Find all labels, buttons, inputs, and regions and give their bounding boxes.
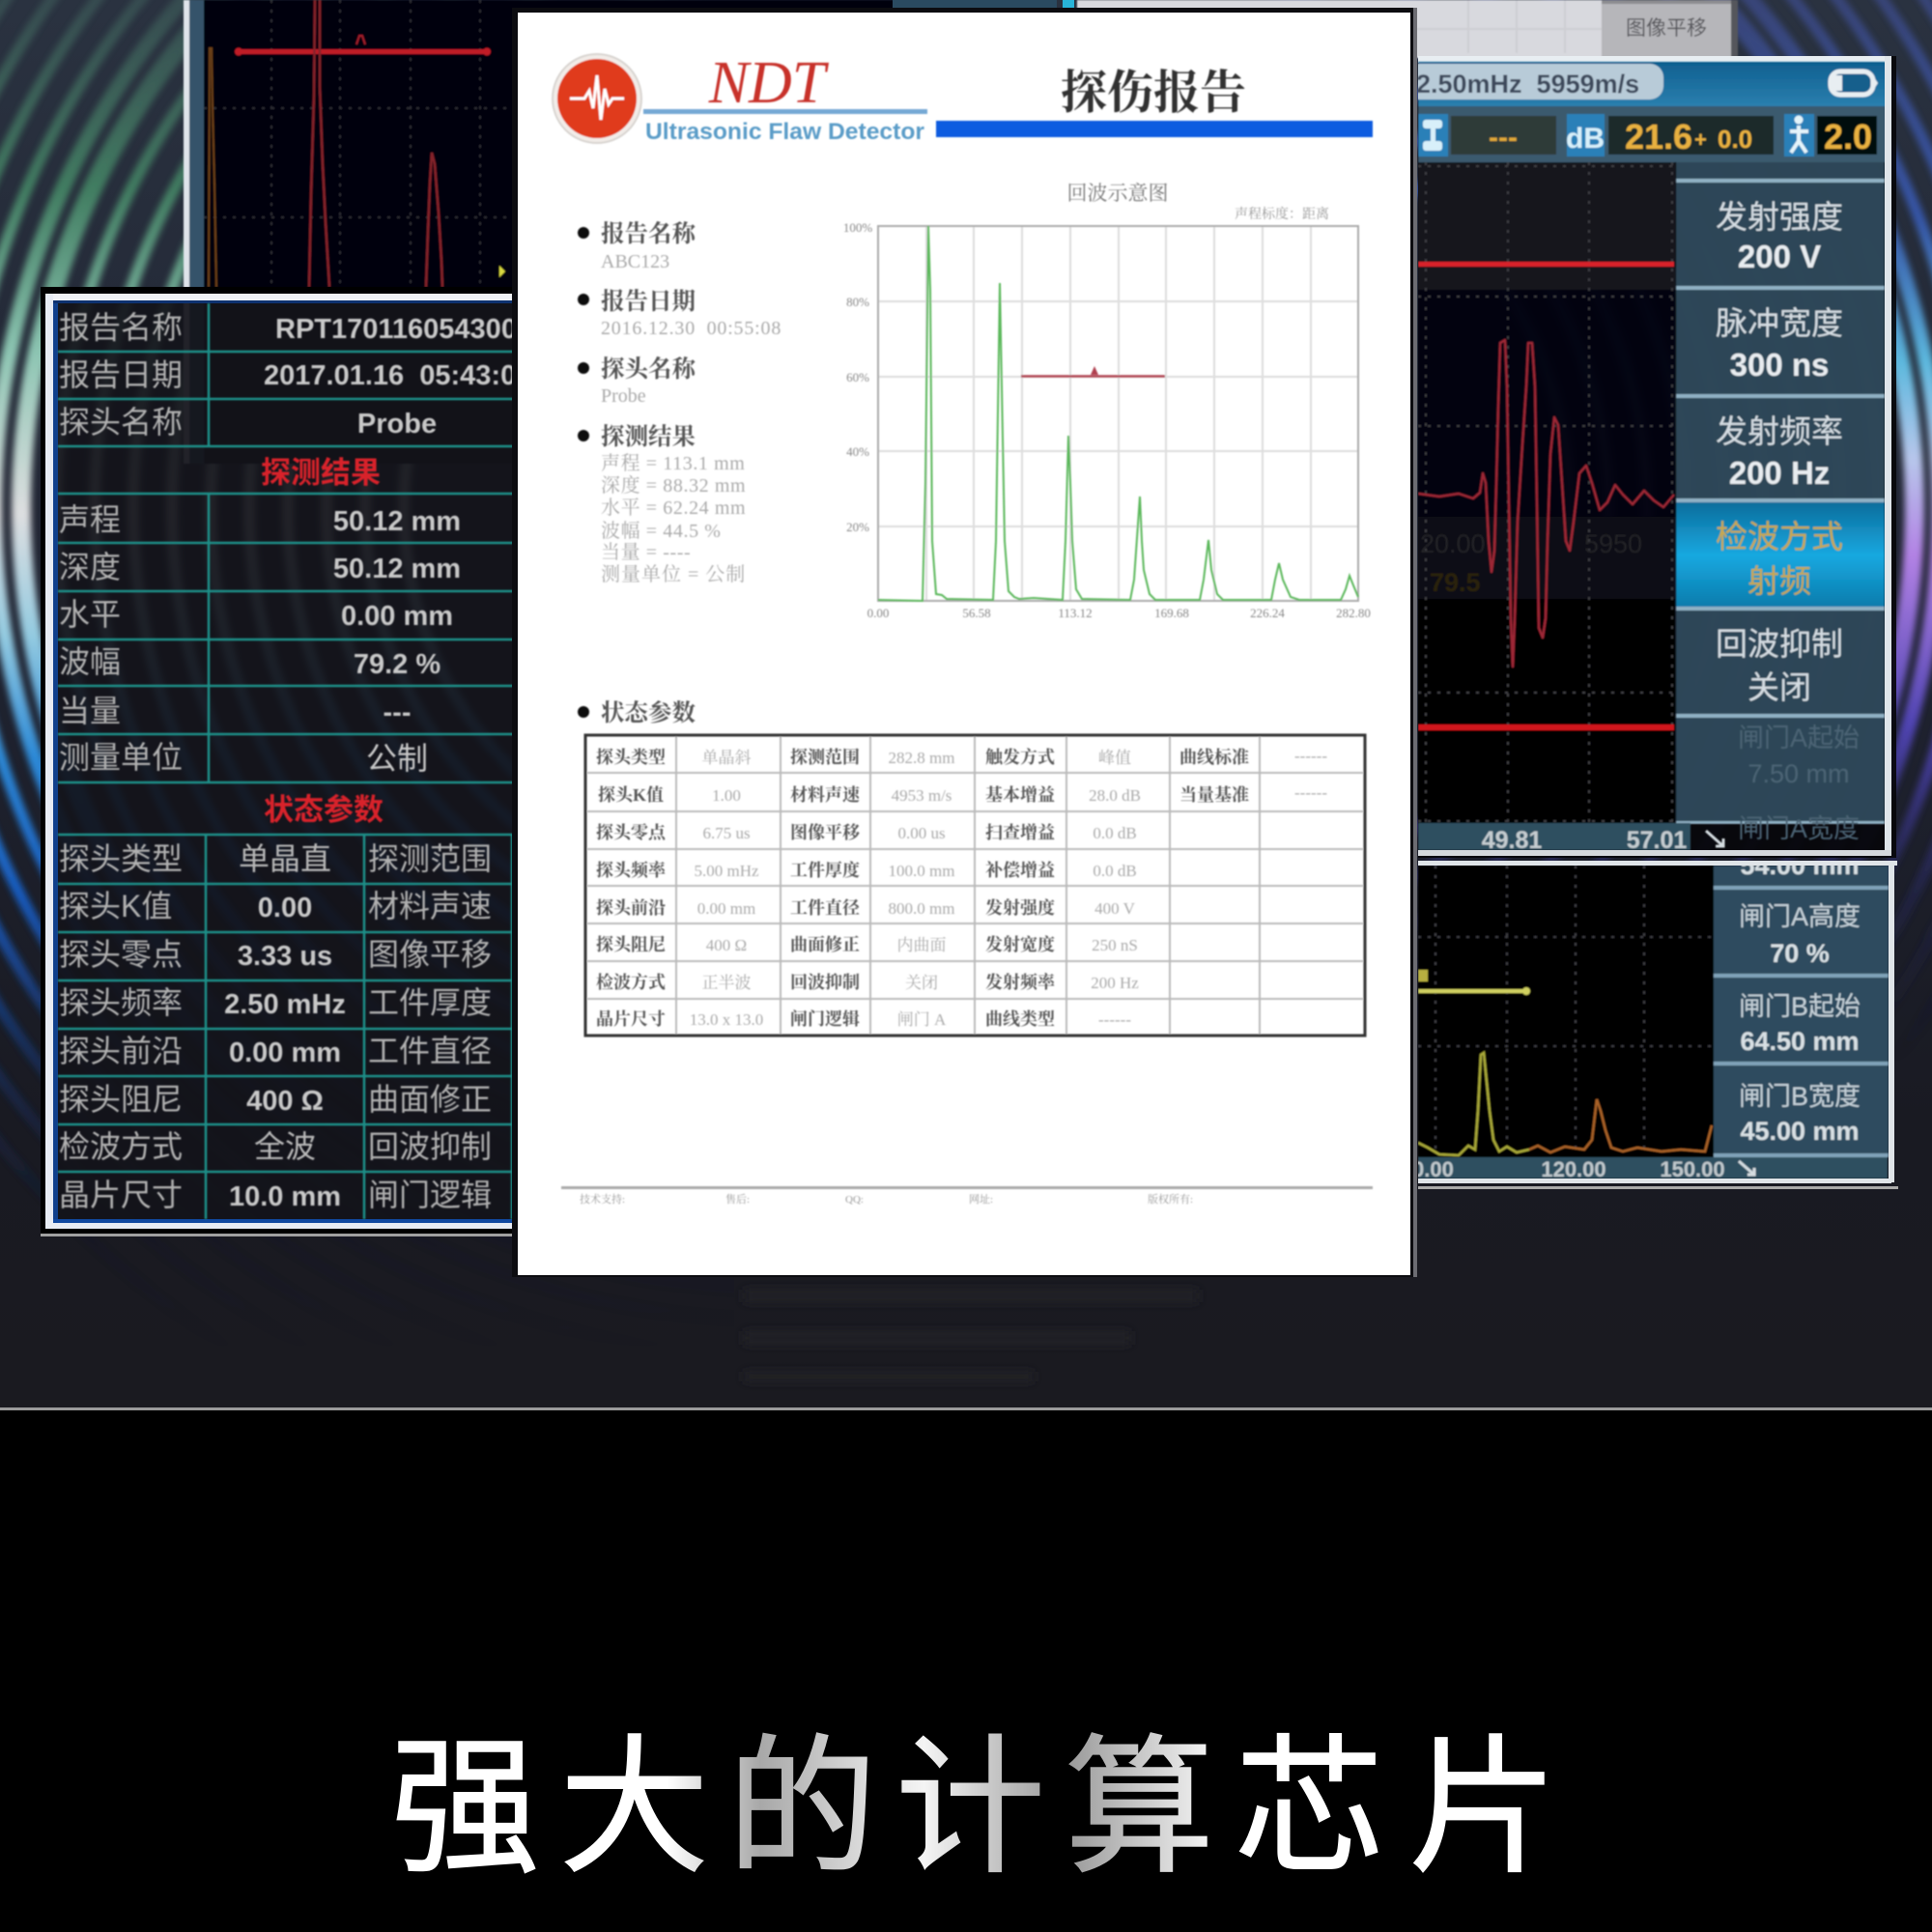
section: status labels: 探头零点	[59, 937, 183, 972]
lower axis: 150.00	[1660, 1157, 1725, 1181]
status parameter table: 关闭	[905, 974, 938, 992]
report info list: ABC123	[601, 251, 669, 272]
report title: 探伤报告	[1061, 68, 1246, 119]
settings menu: 300 ns	[1730, 347, 1829, 383]
section: status values	[224, 841, 346, 1212]
status parameter table: 200 Hz	[1091, 974, 1139, 992]
section: status labels	[59, 841, 492, 1212]
echo chart: 60%	[846, 370, 869, 384]
A-scan chart	[1418, 162, 1675, 823]
section: report info values: 79.2 %	[354, 649, 440, 680]
report info list: 声程 = 113.1 mm	[601, 452, 745, 474]
status parameter table: 扫查增益	[985, 823, 1055, 842]
status parameter table: 0.00 us	[897, 824, 946, 842]
gate settings menu: 70 %	[1770, 939, 1830, 968]
status parameter table: 探头阻尼	[596, 934, 666, 954]
settings menu: 7.50 mm	[1747, 759, 1850, 788]
arrow	[1706, 831, 1723, 846]
section: status labels: 材料声速	[368, 889, 492, 923]
section: status labels: 探头K值	[59, 889, 172, 923]
bottom axis: 49.81	[1482, 827, 1542, 854]
gate settings menu: 64.50 mm	[1740, 1027, 1860, 1056]
report footer	[561, 1186, 1373, 1206]
status row: +	[1694, 128, 1707, 152]
section: report info values: Probe	[357, 409, 437, 440]
status parameter table: 4953 m/s	[892, 786, 952, 805]
lower axis: 120.00	[1541, 1157, 1606, 1181]
status parameter table: 内曲面	[896, 936, 947, 954]
status parameter table: 0.0 dB	[1093, 824, 1137, 842]
background: right concentric light arcs	[1269, 0, 1932, 972]
report info list: 深度 = 88.32 mm	[601, 474, 746, 497]
echo chart: 40%	[846, 444, 869, 459]
panel: lower right screen	[1412, 851, 1889, 1181]
settings menu: 200 Hz	[1729, 455, 1830, 491]
status parameter table: 5.00 mHz	[694, 862, 759, 880]
heading: detection results: 探测结果	[261, 456, 381, 490]
icon: walking figure	[1790, 118, 1808, 153]
status parameter table: 闸门 A	[897, 1010, 947, 1029]
report footer: 售后:	[725, 1192, 750, 1206]
lower screen frame	[1418, 861, 1898, 1189]
status parameter table: 13.0 x 13.0	[690, 1010, 763, 1029]
report info list: 报告名称	[601, 220, 696, 247]
status parameter table: 发射宽度	[985, 934, 1055, 954]
status parameter table: 曲面修正	[790, 935, 860, 954]
echo chart: 100%	[843, 220, 872, 235]
settings menu: 闸门A宽度	[1738, 814, 1860, 843]
section: status labels: 工件厚度	[368, 985, 492, 1020]
echo chart: 56.58	[962, 606, 991, 620]
A-scan chart: 5950	[1584, 529, 1642, 558]
gate B line	[1418, 970, 1530, 995]
panel: left data table	[41, 287, 531, 1236]
section: status values: 0.00	[258, 893, 312, 923]
status row: ---	[1489, 122, 1518, 154]
section: status labels: 回波抑制	[368, 1129, 492, 1164]
echo waveform	[1418, 340, 1674, 667]
section: report info labels: 当量	[59, 694, 121, 728]
status parameter table: 晶片尺寸	[596, 1009, 666, 1029]
gate settings menu: 闸门B起始	[1739, 992, 1861, 1021]
report footer: 网址:	[969, 1192, 993, 1206]
arrow	[1739, 1161, 1754, 1175]
status parameter table: 探头频率	[596, 860, 667, 880]
gate settings menu: 45.00 mm	[1740, 1117, 1860, 1146]
section: status labels: 图像平移	[368, 937, 492, 972]
section: report info labels	[59, 310, 183, 775]
orange start pulse	[209, 48, 216, 287]
report info list: 探测结果	[601, 423, 696, 450]
report info list: 测量单位 = 公制	[601, 563, 746, 585]
settings menu: 发射强度	[1716, 199, 1843, 235]
section: report info labels: 波幅	[59, 644, 121, 679]
section: report info labels: 水平	[59, 597, 121, 632]
bottom axis	[1418, 823, 1723, 854]
logo subtitle: Ultrasonic Flaw Detector	[645, 119, 924, 145]
report info list	[578, 220, 781, 585]
orange echo waveform	[1529, 1099, 1712, 1152]
status parameter table: 工件直径	[790, 898, 861, 918]
echo chart: 20%	[846, 520, 869, 534]
section: status values: 0.00 mm	[229, 1037, 341, 1068]
section: status values: 3.33 us	[238, 941, 332, 972]
report info list: Probe	[601, 385, 646, 407]
logo wordmark NDT: NDT	[708, 50, 830, 116]
blue title bar	[936, 121, 1373, 137]
gate settings menu: 闸门A高度	[1739, 902, 1861, 931]
bottom axis: 57.01	[1627, 827, 1687, 854]
section: status values: 400 Ω	[246, 1086, 324, 1117]
background: left concentric light arcs	[0, 0, 659, 1192]
status parameter table: 发射频率	[985, 972, 1056, 992]
section: report info values: 50.12 mm	[333, 554, 461, 584]
section: report info values: 50.12 mm	[333, 506, 461, 537]
settings menu	[1676, 162, 1885, 843]
section: status labels: 晶片尺寸	[59, 1178, 183, 1212]
heading: status parameters: 状态参数	[264, 793, 384, 827]
status parameter table: 6.75 us	[702, 824, 751, 842]
status parameter table: ------	[1098, 1010, 1131, 1029]
status parameter table: 400 V	[1094, 899, 1136, 918]
report footer: 技术支持:	[580, 1192, 625, 1206]
lower axis	[1412, 1157, 1888, 1181]
status parameter table: 250 nS	[1092, 936, 1138, 954]
report info list: 波幅 = 44.5 %	[601, 520, 722, 542]
section: status values: 10.0 mm	[229, 1181, 341, 1212]
gate settings menu	[1714, 851, 1889, 1157]
status parameter table: 回波抑制	[790, 973, 860, 992]
status parameter table: 曲线标准	[1179, 747, 1249, 767]
status row: 2.0	[1824, 117, 1872, 156]
status parameter table: 探头零点	[596, 822, 668, 842]
section: report info values: 公制	[366, 741, 428, 776]
grey panel label: 图像平移	[1626, 17, 1707, 40]
gate lines	[1418, 262, 1674, 267]
status parameter table: 100.0 mm	[889, 862, 954, 880]
status parameter table: 材料声速	[790, 784, 861, 805]
yellow echo waveform	[1418, 1053, 1529, 1155]
icon: probe symbol	[1423, 120, 1442, 151]
section: report info labels: 测量单位	[59, 740, 183, 775]
echo chart	[843, 220, 1371, 620]
status parameter table: 检波方式	[596, 973, 666, 992]
settings menu: 200 V	[1738, 239, 1821, 274]
echo chart: 0.00	[867, 606, 889, 620]
section: report info values	[264, 314, 531, 776]
settings menu: 检波方式	[1716, 519, 1843, 554]
report info list: 报告日期	[601, 288, 696, 315]
section: status labels: 检波方式	[59, 1129, 183, 1164]
section: status values: 2.50 mHz	[224, 989, 346, 1020]
status parameter table: 基本增益	[985, 785, 1055, 805]
status parameter table: 单晶斜	[701, 749, 752, 767]
table grid lines	[58, 303, 514, 1219]
panel: main right screen	[1391, 56, 1896, 858]
status parameter table: 400 Ω	[706, 936, 747, 954]
settings menu: 发射频率	[1716, 413, 1843, 449]
status parameter table: 探头前沿	[596, 897, 666, 918]
status row: 21.6	[1625, 117, 1692, 156]
red gate line	[235, 36, 491, 56]
top strip behind report	[893, 0, 1074, 10]
report info list: 2016.12.30 00:55:08	[601, 318, 781, 339]
yellow marker	[499, 266, 505, 277]
echo chart: 226.24	[1250, 606, 1285, 620]
section: status labels: 工件直径	[368, 1034, 492, 1068]
section: status labels: 曲面修正	[368, 1082, 492, 1117]
chart note: 声程标度：距离	[1235, 206, 1329, 222]
status parameter table: 探头K值	[598, 784, 664, 805]
section: status labels: 探头类型	[59, 841, 183, 876]
echo chart: 113.12	[1058, 606, 1093, 620]
status parameter table: 探头类型	[596, 747, 666, 767]
status parameter table: 闸门逻辑	[790, 1009, 860, 1029]
status parameter table: ------	[1294, 747, 1327, 765]
section: report info values: 0.00 mm	[341, 601, 453, 632]
section: report info labels: 探头名称	[59, 405, 183, 440]
status parameter table: 补偿增益	[985, 861, 1055, 880]
lower axis: 0.00	[1412, 1157, 1454, 1181]
status parameter table: 当量基准	[1179, 784, 1249, 805]
background: dark top area	[0, 0, 1932, 1408]
status section heading: 状态参数	[601, 699, 696, 726]
status row: 0.0	[1718, 125, 1752, 154]
screen: back-left flaw detector	[184, 0, 895, 464]
status parameter table: 282.8 mm	[889, 749, 954, 767]
section: status labels: 探头频率	[59, 985, 183, 1020]
section: status labels: 探头阻尼	[59, 1082, 183, 1117]
status parameter table	[585, 735, 1365, 1036]
section: report info values: 2017.01.16 05:43:00	[264, 360, 531, 391]
status parameter table: 0.0 dB	[1093, 862, 1137, 880]
settings menu: 脉冲宽度	[1716, 305, 1843, 341]
title: 强大的计算芯片	[390, 1724, 1558, 1891]
settings menu: 回波抑制	[1716, 626, 1843, 662]
status parameter table: 800.0 mm	[889, 899, 954, 918]
status parameter table: 曲线类型	[985, 1009, 1055, 1029]
report info list: 当量 = ----	[601, 541, 691, 563]
status parameter table: 图像平移	[790, 823, 860, 842]
section: status values: 全波	[254, 1129, 316, 1164]
section: report info labels: 声程	[59, 502, 121, 537]
report document	[512, 8, 1417, 1277]
echo chart: 282.80	[1336, 606, 1371, 620]
red echo peaks	[309, 0, 442, 287]
status row	[1418, 106, 1886, 162]
chart heading: 回波示意图	[1066, 182, 1169, 205]
divider line above black footer	[0, 1407, 1932, 1410]
report footer: QQ:	[845, 1194, 864, 1206]
screen: back-right grey panel	[1077, 0, 1738, 58]
ghost text under report	[744, 1290, 1198, 1381]
status parameter table: 工件厚度	[790, 860, 860, 880]
settings menu: 射频	[1747, 563, 1811, 599]
status parameter table: 28.0 dB	[1089, 786, 1141, 805]
status parameter table: 正半波	[701, 974, 752, 992]
status parameter table: 0.00 mm	[697, 899, 755, 918]
status parameter table: 发射强度	[985, 897, 1055, 918]
status parameter table: 1.00	[712, 786, 741, 805]
section: status labels: 探头前沿	[59, 1034, 183, 1068]
gate settings menu: 闸门B宽度	[1739, 1082, 1861, 1111]
gate settings menu: 54.00 mm	[1740, 851, 1860, 880]
echo chart: 169.68	[1154, 606, 1189, 620]
section: report info values: RPT170116054300	[275, 314, 517, 345]
section: status labels: 闸门逻辑	[368, 1178, 492, 1212]
section: report info labels: 深度	[59, 550, 121, 584]
section: report info labels: 报告名称	[59, 310, 183, 345]
logo circle	[553, 54, 641, 143]
section: report info values: ---	[384, 697, 411, 728]
A-scan chart: 20.00	[1420, 529, 1486, 558]
report info list: 水平 = 62.24 mm	[601, 497, 746, 519]
report footer: 版权所有:	[1148, 1192, 1193, 1206]
screen title bar: 2.50mHz 5959m/s	[1416, 70, 1639, 99]
A-scan chart: 79.5	[1430, 568, 1481, 597]
echo chart: 80%	[846, 295, 869, 309]
icon: battery	[1831, 71, 1878, 95]
report info list: 探头名称	[601, 355, 696, 383]
settings menu: 闸门A起始	[1738, 724, 1860, 753]
status parameter table: 触发方式	[985, 748, 1055, 767]
status parameter table: ------	[1294, 783, 1327, 802]
status parameter table: 探测范围	[790, 747, 860, 767]
status row: dB	[1566, 123, 1605, 155]
section: status labels: 探测范围	[368, 841, 492, 876]
section: report info labels: 报告日期	[59, 357, 183, 392]
settings menu: 关闭	[1747, 669, 1811, 705]
screen title bar	[1391, 62, 1886, 106]
logo rule	[643, 109, 927, 114]
black footer band	[0, 1410, 1932, 1932]
status parameter table: 峰值	[1098, 749, 1131, 767]
section: status values: 单晶直	[239, 841, 331, 876]
